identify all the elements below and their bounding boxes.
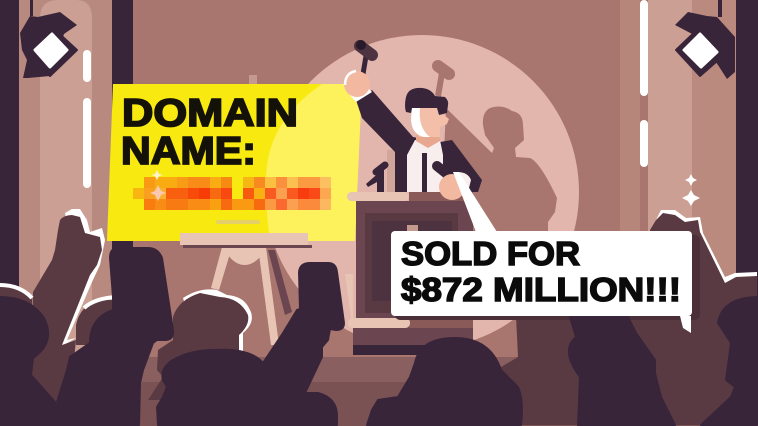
spotlight: left — [20, 0, 77, 78]
heading: domain name: NAME: — [121, 130, 256, 173]
second back head — [76, 297, 118, 345]
sparkles right — [682, 174, 700, 206]
easel — [183, 231, 312, 345]
centre front person with phone — [157, 263, 344, 425]
heading: domain name — [121, 92, 298, 173]
face — [412, 108, 449, 137]
sparkles on sign — [150, 170, 166, 201]
hair — [405, 88, 448, 115]
microphone left — [366, 165, 385, 192]
right-hand microphone — [437, 166, 447, 174]
raised arm and jacket — [356, 90, 482, 192]
centre back head — [148, 289, 252, 400]
podium — [345, 192, 473, 355]
tie — [422, 153, 427, 192]
callout: sold for: $872 MILLION!!! — [401, 271, 681, 308]
far-right front person — [701, 297, 757, 425]
right front person — [569, 317, 675, 425]
auctioneer shadow on wall — [438, 66, 557, 232]
callout: sold for — [391, 231, 692, 316]
right-centre front person — [367, 338, 522, 425]
callout: sold for: SOLD FOR — [401, 235, 580, 272]
easel stub — [249, 75, 257, 85]
crowd: back row — [0, 209, 757, 425]
raised hand — [344, 71, 372, 102]
panel: yellow domain sign — [107, 84, 362, 241]
easel tray — [180, 233, 308, 245]
right cuff and hand — [439, 172, 471, 200]
shirt — [407, 140, 443, 192]
right crowd body — [500, 232, 757, 425]
spotlight: right — [675, 0, 735, 79]
spotlight circle on wall — [265, 35, 579, 349]
neck — [416, 135, 440, 148]
lamp — [35, 34, 67, 67]
right raised hand — [650, 210, 757, 300]
callout pointer — [453, 172, 497, 232]
floor — [0, 357, 758, 426]
sign underline — [216, 220, 260, 224]
raised hand left — [31, 209, 105, 402]
left back head — [0, 285, 32, 345]
podium backing panel — [387, 150, 396, 192]
auctioneer — [344, 40, 482, 200]
left front person — [0, 297, 58, 425]
lamp — [684, 34, 717, 67]
podium top bar — [347, 192, 409, 201]
heading: domain name: DOMAIN — [122, 92, 298, 135]
white sliver under callout — [680, 316, 691, 333]
crowd: front row — [0, 248, 757, 425]
callout shadow — [395, 235, 700, 320]
second front person with phone — [57, 248, 173, 425]
censored pixelated domain — [133, 177, 331, 210]
gavel — [356, 40, 372, 74]
